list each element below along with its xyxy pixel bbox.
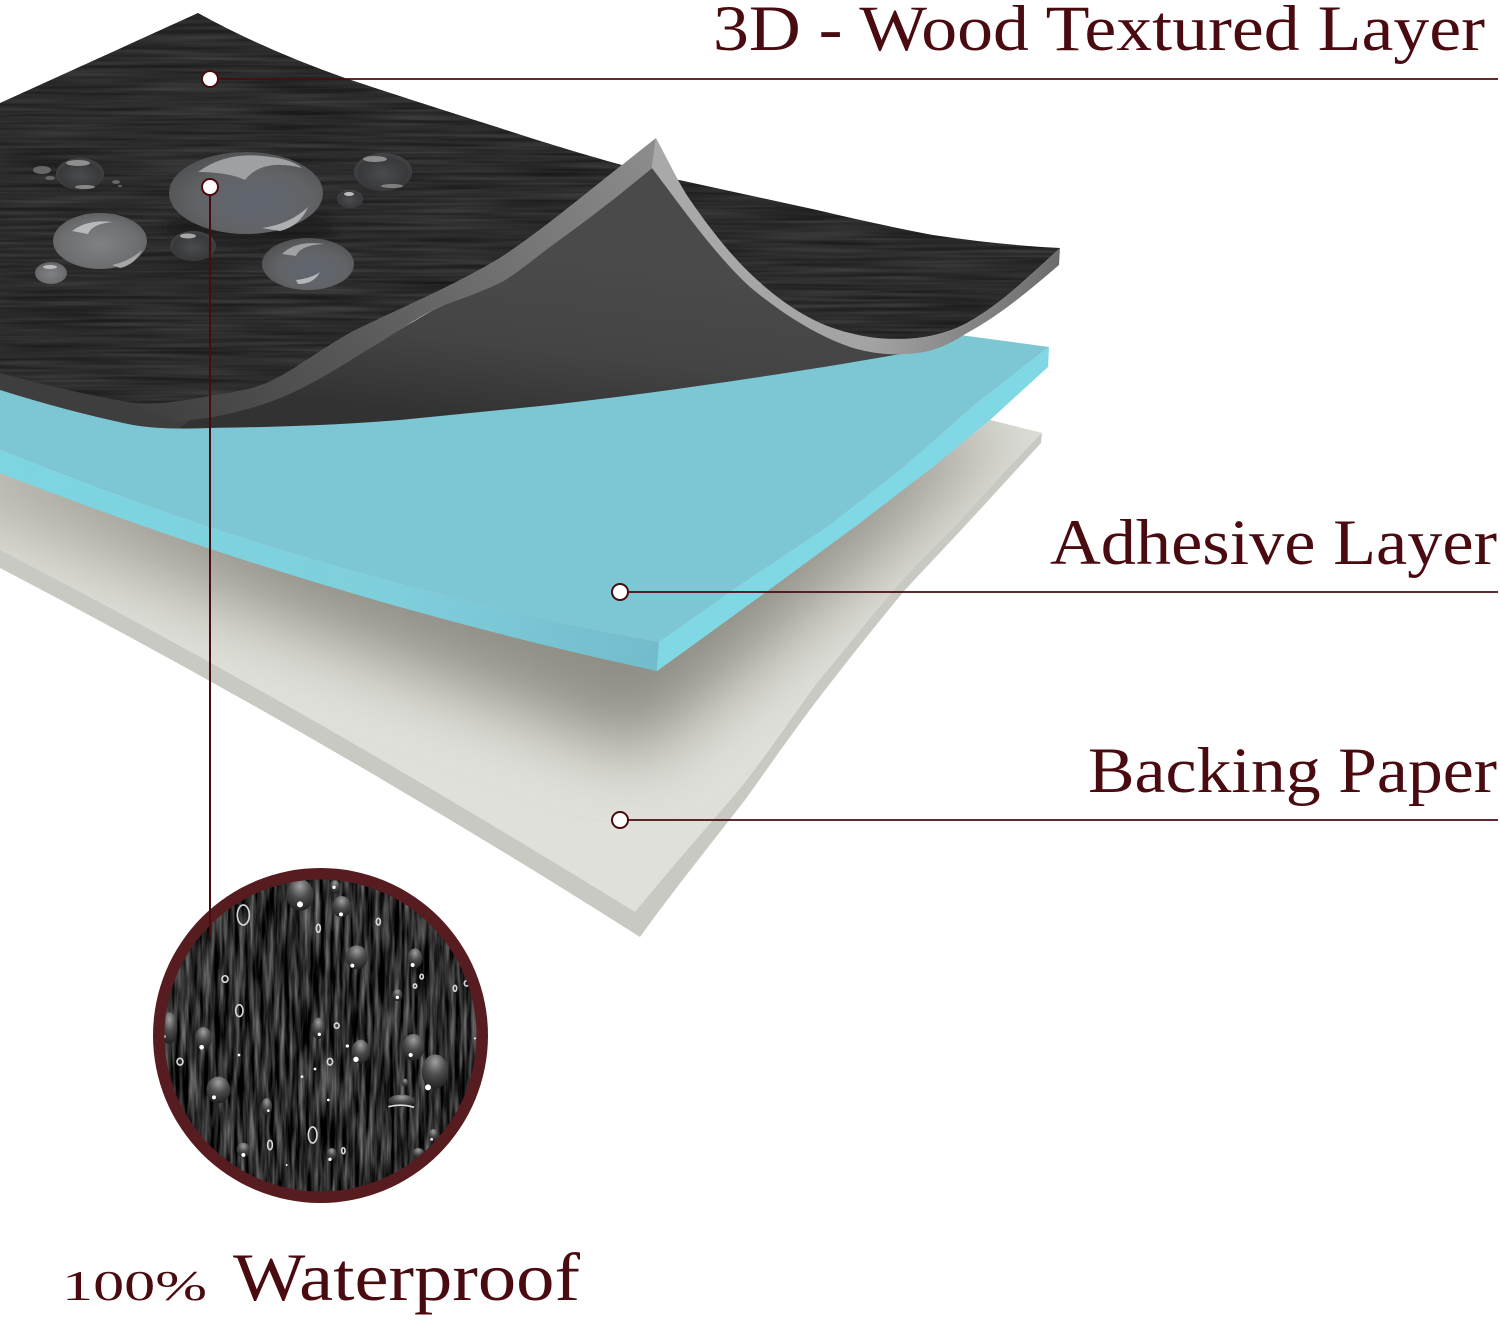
- droplet left large: [53, 213, 147, 269]
- panel: wood layer with curled corner: [0, 0, 1070, 429]
- marker: wood layer: [202, 71, 218, 87]
- flap left edge band: [133, 138, 656, 422]
- droplet upper right: [354, 153, 412, 191]
- droplet right tiny: [337, 190, 363, 208]
- marker: waterproof: [202, 179, 218, 195]
- heading: adhesive layer: Adhesive Layer: [1050, 507, 1497, 579]
- wood surface curled end: [678, 180, 1060, 339]
- flap right edge band: [652, 138, 1060, 354]
- wood underside strip: [0, 370, 300, 429]
- droplet lower left tiny: [35, 262, 67, 284]
- large droplet: [169, 152, 323, 234]
- panel: water droplets: [33, 152, 412, 290]
- heading: waterproof: [62, 1239, 580, 1315]
- leader: waterproof: [209, 187, 211, 937]
- adhesive top face: [0, 335, 1049, 642]
- adhesive right band: [657, 347, 1049, 671]
- wood surface main: [0, 0, 640, 420]
- heading: waterproof: 100%: [62, 1264, 207, 1310]
- leader: backing paper: [620, 819, 1498, 821]
- circle droplets: [161, 879, 476, 1166]
- droplet shadow: [165, 210, 335, 246]
- adhesive side band: [0, 450, 659, 671]
- panel: waterproof magnified circle: [153, 868, 488, 1203]
- droplet lower right: [262, 238, 354, 290]
- droplet upper left: [56, 158, 104, 190]
- marker: adhesive layer: [612, 584, 628, 600]
- marker: backing paper: [612, 812, 628, 828]
- panel: backing paper layer: [0, 420, 1042, 937]
- heading: backing paper: Backing Paper: [1088, 735, 1497, 807]
- tiny beads: [33, 166, 122, 187]
- circle ring: [153, 868, 488, 1203]
- flap underside: [180, 168, 935, 428]
- leader: adhesive layer: [620, 591, 1498, 593]
- heading: waterproof: Waterproof: [233, 1239, 580, 1315]
- circle wood texture: [160, 875, 482, 1197]
- backing paper edge: [0, 420, 1042, 937]
- backing paper shadow: [0, 420, 1020, 755]
- droplet centre small: [170, 231, 216, 261]
- backing paper top face: [0, 420, 1042, 912]
- panel: adhesive layer: [0, 335, 1049, 671]
- leader: wood layer: [210, 78, 1498, 80]
